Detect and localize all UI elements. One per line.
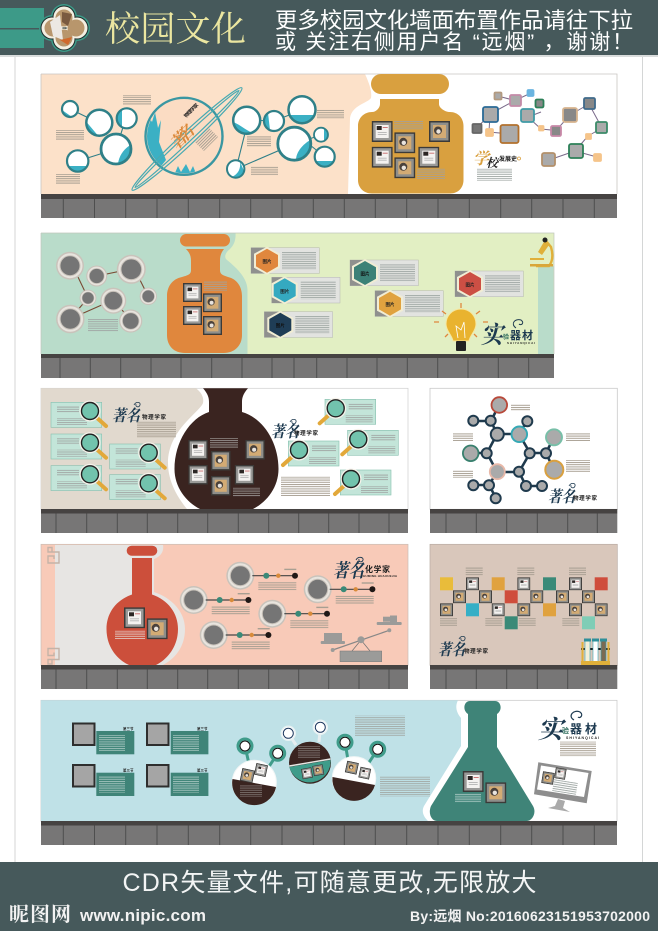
icon: test tube rack <box>581 640 610 665</box>
magnifier card right 3 <box>283 440 339 466</box>
balloon circle 3 <box>332 735 385 801</box>
hexagon card 3: 图片 <box>276 322 285 329</box>
hexagon card 6: 图片 <box>466 282 475 288</box>
molecule diagram <box>463 397 563 503</box>
balloon circle 2 <box>281 720 331 784</box>
hexagon card 4: 图片 <box>360 270 370 278</box>
frame card 1 <box>73 724 134 754</box>
wall base bricks <box>41 821 617 845</box>
timeline medallion 4 <box>258 600 330 629</box>
bottle with photos <box>167 249 242 353</box>
ornament corners <box>48 548 59 664</box>
icon: light bulb <box>434 303 488 351</box>
panel: erlenmeyer flask wall <box>41 700 617 845</box>
heading: famous physicists left <box>112 402 176 438</box>
panel: hexagon laboratory wall <box>41 233 554 378</box>
planet subheading: 物理学家 <box>182 102 200 119</box>
heading: famous physicists <box>548 483 597 506</box>
hexagon card 1: 图片 <box>262 258 272 265</box>
left bubble network <box>62 101 137 172</box>
bottle lid <box>371 74 449 94</box>
frame card 1: 第三节 <box>123 726 134 731</box>
teal side column <box>538 266 554 354</box>
network caption <box>88 319 118 332</box>
heading: lab equipment: 验 <box>562 726 569 735</box>
heading: famous chemists <box>333 557 398 582</box>
left captions <box>56 95 151 184</box>
hexagon card 3 <box>264 311 333 339</box>
heading: famous chemists: 著名 <box>333 560 365 582</box>
wall base bricks <box>430 665 617 689</box>
header stripes <box>0 8 44 48</box>
hexagon card 5 <box>375 290 443 318</box>
frame card 3: 第三节 <box>123 768 134 772</box>
panel: colour tile photo wall <box>430 544 617 689</box>
header note line 2: 或 关注右侧用户名 “远烟” ，谢谢！ <box>275 31 633 54</box>
planet heading: 著名 <box>167 121 199 153</box>
magnifier card left 1 <box>51 400 106 427</box>
heading: lab equipment: SHIYANQICAI <box>566 736 599 740</box>
hexagon card 5: 图片 <box>386 301 395 308</box>
timeline medallion 3 <box>200 621 271 650</box>
planet caption <box>195 128 218 151</box>
icon: computer monitor <box>534 762 592 812</box>
timeline medallion 2 <box>226 562 298 591</box>
timeline medallion 1 <box>180 586 251 615</box>
heading: famous physicists right: 物理学家 <box>294 429 318 437</box>
nipic logo text: 昵图网 <box>9 903 71 926</box>
wall base bricks <box>430 509 617 533</box>
hexagon card 2 <box>272 276 340 304</box>
right captions <box>247 109 344 176</box>
heading: famous physicists: 物理学家 <box>573 494 597 502</box>
heading: school history: 学 <box>473 150 491 168</box>
frame card 2: 第三节 <box>197 726 208 731</box>
footer banner <box>0 862 658 931</box>
heading: lab equipment: 器材 <box>570 721 597 736</box>
heading: famous physicists: 著名 <box>438 641 466 659</box>
timeline medallion 5 <box>304 575 375 604</box>
grey bottle backdrop <box>55 545 185 665</box>
heading: famous physicists right <box>271 419 318 441</box>
heading: lab equipment <box>481 320 535 349</box>
frame card 3 <box>73 765 134 796</box>
heading: famous physicists left: 著名 <box>112 407 141 425</box>
heading: lab equipment: 实 <box>538 716 567 744</box>
molecule captions <box>453 404 590 478</box>
hexagon card 6 <box>455 270 523 298</box>
heading: school history <box>473 150 520 181</box>
heading: famous chemists: ZHUMING HUAXUEJIA <box>361 574 398 578</box>
heading: famous physicists: 物理学家 <box>464 647 488 655</box>
wall base bricks <box>41 665 408 689</box>
wall base bricks <box>41 194 617 218</box>
dark round bottle with photos <box>174 388 278 509</box>
heading: lab equipment: 器材 <box>510 328 533 342</box>
footer headline: CDR矢量文件,可随意更改,无限放大 <box>122 869 536 897</box>
magnifier card left 5 <box>110 473 165 500</box>
heading: famous physicists: 著名 <box>548 488 576 506</box>
panel: magnifier physicists wall <box>41 388 408 533</box>
wall base bricks <box>41 354 554 378</box>
heading: lab equipment: 验 <box>503 333 509 341</box>
square node network <box>472 90 607 166</box>
hexagon card 4 <box>350 259 418 287</box>
frame card 4 <box>147 765 208 796</box>
hexagon card 2: 图片 <box>280 288 290 295</box>
author and image number: By:远烟 No:20160623151953702000 <box>410 908 650 924</box>
heading: school history: 发展史 <box>499 155 517 163</box>
right bubble network <box>227 96 335 178</box>
circle network <box>56 252 157 333</box>
caption lines <box>281 476 330 496</box>
bottle with photos <box>358 99 464 194</box>
heading: lab equipment: SHIYANQICAI <box>507 341 535 345</box>
heading: famous physicists left: 物理学家 <box>142 413 166 421</box>
wall base bricks <box>41 509 408 533</box>
magnifier card right 4 <box>335 468 391 495</box>
icon: portrait medallion <box>39 4 90 52</box>
bottle lid <box>180 234 230 246</box>
balance scale illustration <box>321 616 402 662</box>
magnifier card left 2 <box>51 432 106 459</box>
heading: famous physicists <box>438 636 488 659</box>
planet illustration <box>131 87 243 191</box>
panel: molecule wall <box>430 388 617 533</box>
icon: microscope <box>530 238 553 266</box>
heading: school history: 校 <box>486 156 501 170</box>
title: 校园文化 <box>105 10 246 49</box>
heading: famous chemists: 化学家 <box>365 564 390 574</box>
panel: chemist flask wall <box>41 544 408 689</box>
heading: lab equipment <box>538 711 599 757</box>
website: www.nipic.com <box>79 906 206 925</box>
heading: famous physicists right: 著名 <box>271 423 300 441</box>
tile captions <box>440 567 586 626</box>
balloon circle 1 <box>232 739 285 805</box>
header note line 1: 更多校园文化墙面布置作品请往下拉 <box>275 8 633 33</box>
red flask lid <box>127 546 157 556</box>
tile grid <box>440 577 608 629</box>
panel: planet and school history wall <box>41 74 617 218</box>
magnifier card right 1 <box>320 398 376 424</box>
hexagon card 1 <box>251 247 319 275</box>
magnifier card right 2 <box>342 429 398 455</box>
frame card 2 <box>147 724 208 754</box>
teal flask with photos <box>430 701 534 821</box>
magnifier card left 3 <box>51 464 106 491</box>
frame card 4: 第三节 <box>197 768 208 772</box>
header banner <box>0 0 658 57</box>
magnifier card left 4 <box>110 442 165 469</box>
red flask with photos <box>106 558 178 665</box>
balloon captions <box>355 716 430 797</box>
heading: lab equipment: 实 <box>481 322 507 349</box>
